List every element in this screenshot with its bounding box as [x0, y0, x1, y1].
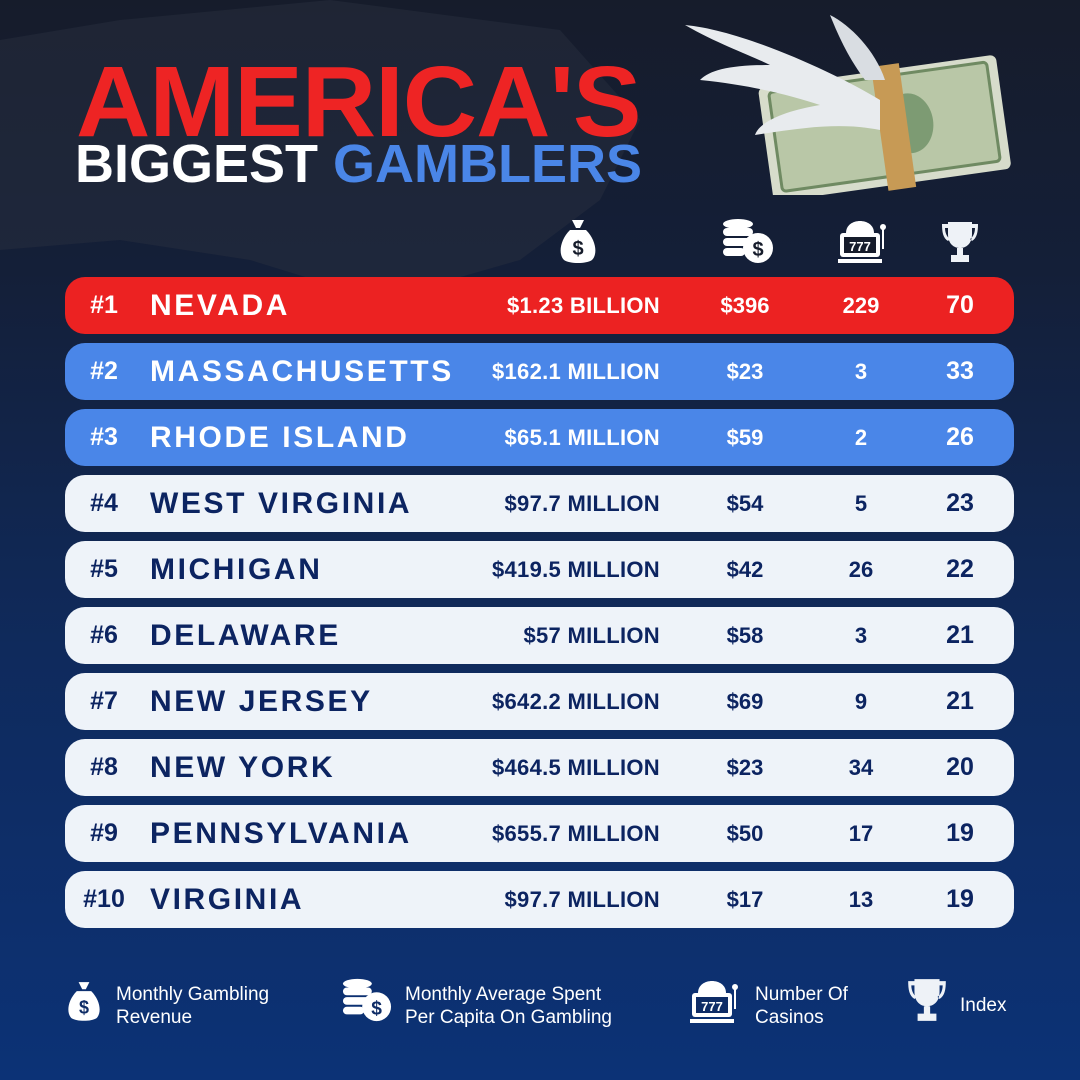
row 4: WEST VIRGINIA — [150, 487, 412, 520]
legend text: casinos — [755, 984, 848, 1028]
row 8: NEW YORK — [150, 751, 335, 784]
row 2: 33 — [946, 357, 974, 385]
row 8: $464.5 MILLION — [492, 755, 660, 780]
row 9: #9 — [90, 819, 118, 847]
row 10: #10 — [83, 885, 125, 913]
row 6: $57 MILLION — [523, 623, 660, 648]
icon header: slot machine: 777 — [849, 239, 871, 254]
legend icon: money bag: $ — [79, 998, 89, 1018]
row 5: 26 — [849, 557, 873, 582]
row 6: #6 — [90, 621, 118, 649]
legend text: per capita: Per Capita On Gambling — [405, 1007, 612, 1028]
row 3: $65.1 MILLION — [504, 425, 660, 450]
illustration: winged money — [685, 15, 1011, 195]
row 9: PENNSYLVANIA — [150, 817, 412, 850]
row 3: $59 — [727, 425, 763, 450]
row 4 — [65, 475, 1014, 532]
row 2: #2 — [90, 357, 118, 385]
icon header: trophy — [942, 222, 978, 262]
row 8: 34 — [849, 755, 873, 780]
icon header: slot machine — [838, 221, 886, 263]
row 9: 19 — [946, 819, 974, 847]
row 6: 21 — [946, 621, 974, 649]
legend text: revenue: Monthly Gambling — [116, 984, 269, 1005]
row 3: 26 — [946, 423, 974, 451]
legend text: revenue: Revenue — [116, 1007, 192, 1028]
row 2: 3 — [855, 359, 867, 384]
row 1: #1 — [90, 291, 118, 319]
row 7: 9 — [855, 689, 867, 714]
row 9: 17 — [849, 821, 873, 846]
legend icon: trophy — [908, 979, 946, 1021]
row 5: 22 — [946, 555, 974, 583]
row 7 — [65, 673, 1014, 730]
row 7: NEW JERSEY — [150, 685, 373, 718]
row 10: 19 — [946, 885, 974, 913]
row 8: $23 — [727, 755, 763, 780]
row 4: $97.7 MILLION — [504, 491, 660, 516]
row 1: 70 — [946, 291, 974, 319]
row 1: $396 — [721, 293, 769, 318]
row 10: $97.7 MILLION — [504, 887, 660, 912]
row 5 — [65, 541, 1014, 598]
row 4: #4 — [90, 489, 118, 517]
icon header: coins: $ — [752, 239, 764, 261]
legend text: casinos: Number Of — [755, 984, 848, 1005]
row 8 — [65, 739, 1014, 796]
title: BIGGEST GAMBLERS — [75, 134, 642, 194]
row 1: $1.23 BILLION — [507, 293, 660, 318]
row 2: MASSACHUSETTS — [150, 355, 454, 388]
row 7: $642.2 MILLION — [492, 689, 660, 714]
row 1: 229 — [843, 293, 879, 318]
row 3: #3 — [90, 423, 118, 451]
row 9: $50 — [727, 821, 763, 846]
legend icon: money bag — [68, 982, 100, 1021]
row 8: 20 — [946, 753, 974, 781]
row 3: RHODE ISLAND — [150, 421, 410, 454]
row 3: 2 — [855, 425, 867, 450]
row 10: $17 — [727, 887, 763, 912]
row 7: $69 — [727, 689, 763, 714]
table rows — [65, 277, 1014, 928]
legend icon: coins: $ — [371, 998, 382, 1019]
title: AMERICA'S — [76, 46, 641, 158]
row 5: #5 — [90, 555, 118, 583]
legend icon: slot machine — [690, 981, 738, 1023]
legend text: per capita — [405, 984, 612, 1028]
row 2: $162.1 MILLION — [492, 359, 660, 384]
row 7: #7 — [90, 687, 118, 715]
row 9: $655.7 MILLION — [492, 821, 660, 846]
icon header: coins — [723, 219, 773, 263]
row 8: #8 — [90, 753, 118, 781]
row 2 — [65, 343, 1014, 400]
legend text: casinos: Casinos — [755, 1007, 824, 1028]
row 10 — [65, 871, 1014, 928]
row 1 — [65, 277, 1014, 334]
row 6: DELAWARE — [150, 619, 341, 652]
legend text: per capita: Monthly Average Spent — [405, 984, 601, 1005]
legend text: revenue — [116, 984, 269, 1028]
background map shape — [0, 0, 640, 277]
legend icon: slot machine: 777 — [701, 999, 723, 1014]
row 2: $23 — [727, 359, 763, 384]
legend icon: coins — [342, 978, 392, 1022]
row 6 — [65, 607, 1014, 664]
row 6: $58 — [727, 623, 763, 648]
legend — [68, 978, 1006, 1028]
row 5: MICHIGAN — [150, 553, 322, 586]
icon header: money bag: $ — [572, 238, 584, 260]
row 9 — [65, 805, 1014, 862]
row 10: 13 — [849, 887, 873, 912]
row 4: $54 — [727, 491, 763, 516]
row 6: 3 — [855, 623, 867, 648]
row 4: 5 — [855, 491, 867, 516]
row 10: VIRGINIA — [150, 883, 304, 916]
icon header: money bag — [560, 220, 596, 263]
row 5: $419.5 MILLION — [492, 557, 660, 582]
row 3 — [65, 409, 1014, 466]
legend text: index: Index — [960, 995, 1006, 1016]
row 4: 23 — [946, 489, 974, 517]
row 1: NEVADA — [150, 289, 290, 322]
row 7: 21 — [946, 687, 974, 715]
row 5: $42 — [727, 557, 763, 582]
